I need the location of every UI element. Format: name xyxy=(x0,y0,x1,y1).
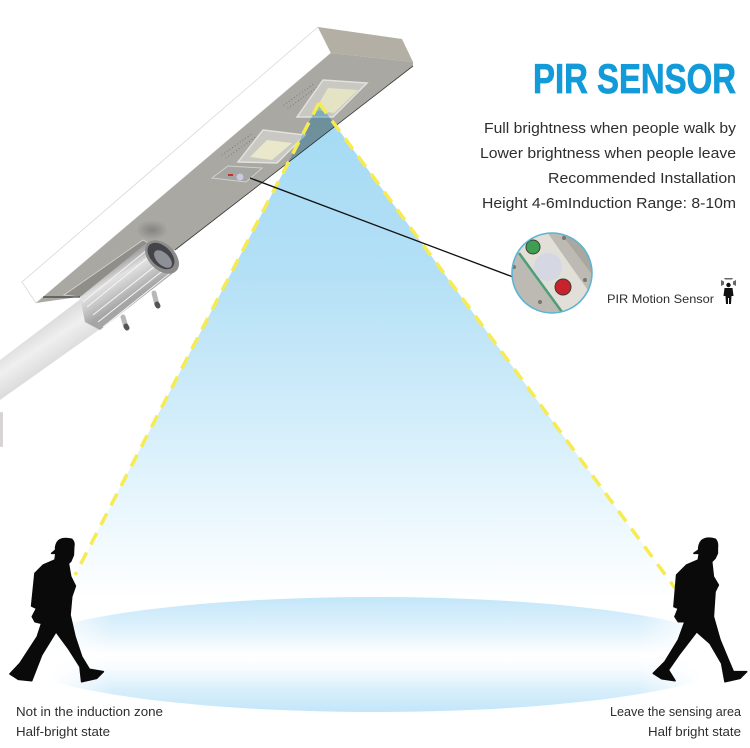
front LED module xyxy=(297,80,367,117)
underside lower edge xyxy=(175,66,413,250)
green indicator xyxy=(526,240,540,254)
right caption: Half bright state xyxy=(648,724,741,739)
silhouette: left walker xyxy=(10,539,103,682)
lamp end cap xyxy=(318,27,413,62)
description text: Lower brightness when people leave xyxy=(480,145,736,162)
PIR sensor on lamp xyxy=(212,166,262,182)
description text xyxy=(480,120,737,212)
mounting bracket xyxy=(80,234,185,330)
mounting bolts xyxy=(123,293,158,328)
screws xyxy=(512,236,587,304)
sensor close-up circle xyxy=(512,234,592,312)
vent dots xyxy=(222,83,319,158)
sensor board strip xyxy=(518,234,588,311)
right caption xyxy=(610,704,742,739)
board green edge xyxy=(519,253,562,312)
tube opening xyxy=(139,234,185,280)
sensing ground ellipse xyxy=(10,596,740,713)
shadow above bracket xyxy=(136,220,168,240)
description text: Full brightness when people walk by xyxy=(484,120,737,137)
leader line to sensor xyxy=(250,178,513,277)
rear LED module xyxy=(238,130,305,163)
right caption: Leave the sensing area xyxy=(610,704,742,719)
PIR motion sensor label: PIR Motion Sensor xyxy=(607,292,714,306)
red indicator xyxy=(555,279,571,295)
description text: Recommended Installation xyxy=(548,170,736,187)
mounting plate xyxy=(64,240,152,297)
tube ridges xyxy=(83,246,174,327)
yellow dashed cone edges xyxy=(75,103,675,588)
plate bottom edge xyxy=(43,296,80,298)
PIR dome xyxy=(534,253,562,281)
housing shading xyxy=(562,235,591,273)
left caption: Not in the induction zone xyxy=(16,704,163,719)
solar panel edge xyxy=(22,27,331,303)
left caption xyxy=(16,704,163,739)
solar street light body xyxy=(22,27,413,303)
silhouette: right walker xyxy=(653,538,747,682)
street light pole xyxy=(0,292,110,400)
sensor close-up ring xyxy=(512,233,592,313)
pole end piece xyxy=(0,412,3,447)
left caption: Half-bright state xyxy=(16,724,110,739)
icon: motion sensor person xyxy=(721,278,736,304)
lamp underside xyxy=(36,53,413,303)
sensing cone xyxy=(60,103,690,602)
description text: Height 4-6mInduction Range: 8-10m xyxy=(482,195,736,212)
bracket tube xyxy=(80,242,177,330)
